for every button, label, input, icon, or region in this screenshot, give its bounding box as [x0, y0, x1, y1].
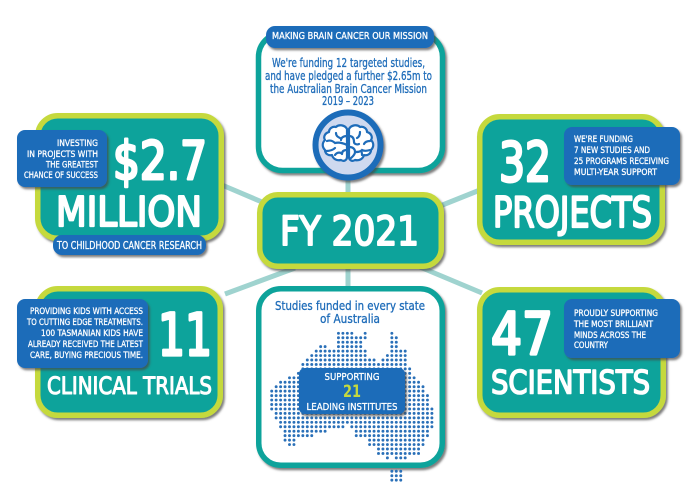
callout: we're funding: WE'RE FUNDING — [574, 135, 633, 145]
headline number: 11: 11 — [158, 301, 212, 369]
callout: providing kids with access — [17, 299, 148, 368]
pill: to childhood cancer research: TO CHILDHOOD CANCER RESEARCH — [56, 240, 202, 252]
callout: supporting 21 leading institutes: LEADING INSTITUTES — [306, 402, 398, 413]
callout: we're funding: MULTI-YEAR SUPPORT — [574, 168, 657, 178]
mission text: We're funding 12 targeted studies, — [272, 56, 425, 70]
callout: investing in projects: THE GREATEST — [45, 160, 98, 170]
panel text: of Australia — [320, 312, 380, 326]
connector spokes — [222, 170, 482, 294]
callout: we're funding: 25 PROGRAMS RECEIVING — [574, 157, 669, 167]
mission text — [265, 56, 432, 108]
panel: brain cancer mission — [258, 26, 442, 178]
dotted map of Australia — [272, 333, 432, 480]
callout: supporting 21 leading institutes — [299, 368, 405, 414]
heading pill: making brain cancer our mission — [266, 26, 434, 48]
mission text: and have pledged a further $2.65m to — [265, 69, 432, 83]
pill: to childhood cancer research — [53, 235, 206, 255]
callout: providing kids with access: ALREADY RECEIVED THE LATEST — [28, 340, 143, 350]
callout: we're funding: 7 NEW STUDIES AND — [574, 146, 650, 156]
headline number: 32: 32 — [499, 131, 551, 194]
callout: proudly supporting: MINDS ACROSS THE — [574, 331, 646, 341]
headline number: $2.7: $2.7 — [113, 131, 207, 192]
callout: proudly supporting: PROUDLY SUPPORTING — [574, 309, 658, 319]
callout: investing in projects: CHANCE OF SUCCESS — [24, 171, 98, 181]
callout: proudly supporting: COUNTRY — [574, 341, 608, 351]
callout: supporting 21 leading institutes: SUPPORTING — [324, 372, 380, 383]
callout: providing kids with access: TO CUTTING EDGE TREATMENTS. — [26, 318, 143, 328]
icon: brain in circle — [316, 112, 380, 178]
callout: providing kids with access: PROVIDING KIDS WITH ACCESS — [30, 307, 143, 317]
centre title: FY 2021 — [280, 209, 419, 255]
callout: proudly supporting: THE MOST BRILLIANT — [573, 320, 653, 330]
headline word: clinical trials: CLINICAL TRIALS — [47, 372, 212, 400]
panel: FY 2021 centre — [260, 195, 441, 266]
headline word: million: MILLION — [56, 188, 202, 236]
panel: 47 scientists — [480, 290, 680, 415]
callout: providing kids with access: CARE, BUYING PRECIOUS TIME. — [30, 351, 143, 361]
callout: we're funding — [564, 127, 680, 185]
callout: investing in projects: INVESTING — [57, 139, 98, 149]
headline word: scientists: SCIENTISTS — [491, 364, 650, 402]
callout: providing kids with access: 100 TASMANIAN KIDS HAVE — [41, 329, 143, 339]
mission text: 2019 – 2023 — [322, 94, 374, 108]
callout: proudly supporting — [564, 299, 680, 358]
panel: 11 clinical trials — [17, 289, 220, 415]
headline number: 47: 47 — [491, 300, 553, 368]
callout: investing in projects: IN PROJECTS WITH — [27, 150, 98, 160]
heading pill: making brain cancer our mission: MAKING BRAIN CANCER OUR MISSION — [272, 31, 428, 42]
mission text: the Australian Brain Cancer Mission — [270, 82, 427, 96]
panel text — [275, 299, 425, 326]
callout: investing in projects — [17, 130, 107, 187]
panel text: Studies funded in every state — [275, 299, 425, 313]
callout: supporting 21 leading institutes: 21 — [343, 382, 361, 402]
headline word: projects: PROJECTS — [493, 188, 652, 237]
panel: $2.7 million — [17, 116, 221, 255]
panel: studies funded in every state — [259, 289, 442, 480]
panel: 32 projects — [480, 117, 680, 242]
